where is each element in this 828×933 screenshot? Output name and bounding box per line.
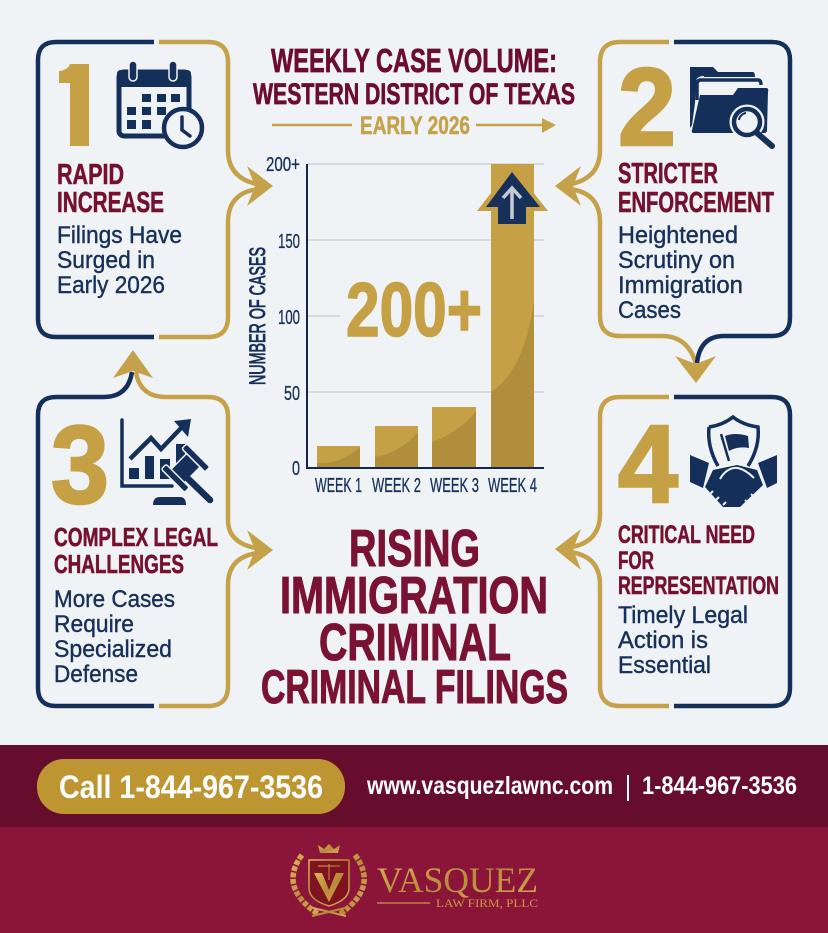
panel 2 heading: STRICTER: [618, 158, 718, 190]
logo wordmark: LAW FIRM, PLLC: [436, 896, 538, 910]
panel 1 frame and arrow: [38, 42, 273, 337]
website and phone: 1-844-967-3536: [642, 772, 797, 800]
x axis labels: [315, 475, 537, 497]
panel 4 body text: Timely Legal: [618, 602, 748, 629]
number 2: 2: [618, 46, 676, 169]
bar week 3: [432, 407, 476, 468]
panel 3: complex legal challenges: [38, 350, 273, 706]
panel 2 body text: Scrutiny on: [618, 247, 735, 274]
website and phone: www.vasquezlawnc.com: [366, 772, 613, 800]
panel 3 body text: More Cases: [54, 586, 175, 613]
icon: folders with magnifier: [690, 67, 772, 146]
panel 2 body text: Cases: [618, 297, 681, 324]
y axis labels: 0: [292, 458, 300, 480]
panel 2 body text: [618, 222, 743, 324]
panel 2: stricter enforcement: [555, 42, 790, 383]
y axis labels: 50: [284, 383, 300, 405]
chart title: [253, 42, 575, 140]
panel 1 heading: [57, 159, 164, 219]
panel 1 body text: [57, 222, 182, 299]
icon: chart with gavel: [122, 419, 210, 505]
y axis title: NUMBER OF CASES: [245, 247, 270, 385]
panel 3 heading: COMPLEX LEGAL: [54, 522, 218, 552]
icon: upward arrow on bar: [477, 166, 548, 226]
number 3: 3: [51, 404, 109, 527]
panel 1: rapid increase: [38, 42, 273, 337]
panel 3 frame and arrows: [38, 350, 273, 706]
panel 1 body text: Filings Have: [57, 222, 182, 249]
y axis labels: 200+: [266, 154, 300, 176]
chart title: WEEKLY CASE VOLUME:: [271, 42, 557, 79]
x axis labels: WEEK 1: [315, 475, 362, 497]
contact bar: [0, 745, 828, 827]
date subtitle with arrow: [272, 112, 556, 140]
bar week 4: [491, 164, 534, 468]
number 1: 1: [50, 45, 112, 170]
y axis labels: [266, 154, 300, 480]
panel 3 body text: Require: [54, 611, 134, 638]
panel 1 body text: Early 2026: [57, 272, 165, 299]
panel 4 body text: Action is: [618, 627, 708, 654]
main title: CRIMINAL: [319, 614, 511, 672]
main title: RISING: [349, 520, 480, 578]
panel 4 heading: CRITICAL NEED: [618, 521, 755, 549]
y axis labels: 100: [278, 307, 300, 329]
x axis labels: WEEK 3: [430, 475, 479, 497]
panel 3 body text: Specialized: [54, 636, 172, 663]
panel 1 heading: INCREASE: [57, 187, 164, 219]
call button: [37, 759, 345, 814]
panel 4: critical need for representation: [555, 397, 790, 706]
panel 2 body text: Immigration: [618, 272, 743, 299]
panel 2 body text: Heightened: [618, 222, 738, 249]
y axis labels: 150: [278, 231, 300, 253]
main title: IMMIGRATION: [280, 567, 548, 625]
panel 4 heading: FOR: [618, 547, 654, 575]
x axis labels: WEEK 4: [488, 475, 537, 497]
panel 3 body text: Defense: [54, 661, 138, 688]
logo band: [0, 827, 828, 933]
website and phone: [366, 772, 797, 801]
call button: Call 1-844-967-3536: [59, 769, 323, 805]
x axis labels: WEEK 2: [372, 475, 421, 497]
bar week 1: [317, 446, 360, 468]
logo wordmark: VASQUEZ: [377, 860, 538, 900]
panel 4 body text: [618, 602, 748, 679]
date subtitle with arrow: EARLY 2026: [360, 112, 470, 140]
bar week 2: [375, 426, 418, 468]
bar chart: weekly case volume: [245, 154, 548, 497]
panel 4 body text: Essential: [618, 652, 711, 679]
callout: 200+: 200+: [346, 268, 482, 353]
panel 2 heading: [618, 158, 774, 219]
panel 2 frame and arrows: [555, 42, 790, 383]
panel 3 body text: [54, 586, 175, 688]
panel 3 heading: CHALLENGES: [54, 549, 184, 579]
chart title: WESTERN DISTRICT OF TEXAS: [253, 78, 575, 111]
logo: Vasquez Law Firm crest: [293, 844, 364, 916]
panel 4 heading: [618, 521, 779, 600]
main title: CRIMINAL FILINGS: [261, 660, 568, 713]
panel 4 frame and arrow: [555, 397, 790, 706]
panel 1 body text: Surged in: [57, 247, 155, 274]
icon: calendar with clock: [117, 61, 202, 147]
panel 1 heading: RAPID: [57, 159, 124, 191]
panel 3 heading: [54, 522, 218, 579]
icon: shield and handshake: [690, 417, 777, 507]
main title: [261, 520, 568, 713]
number 1: [59, 64, 89, 146]
number 4: 4: [618, 403, 678, 526]
